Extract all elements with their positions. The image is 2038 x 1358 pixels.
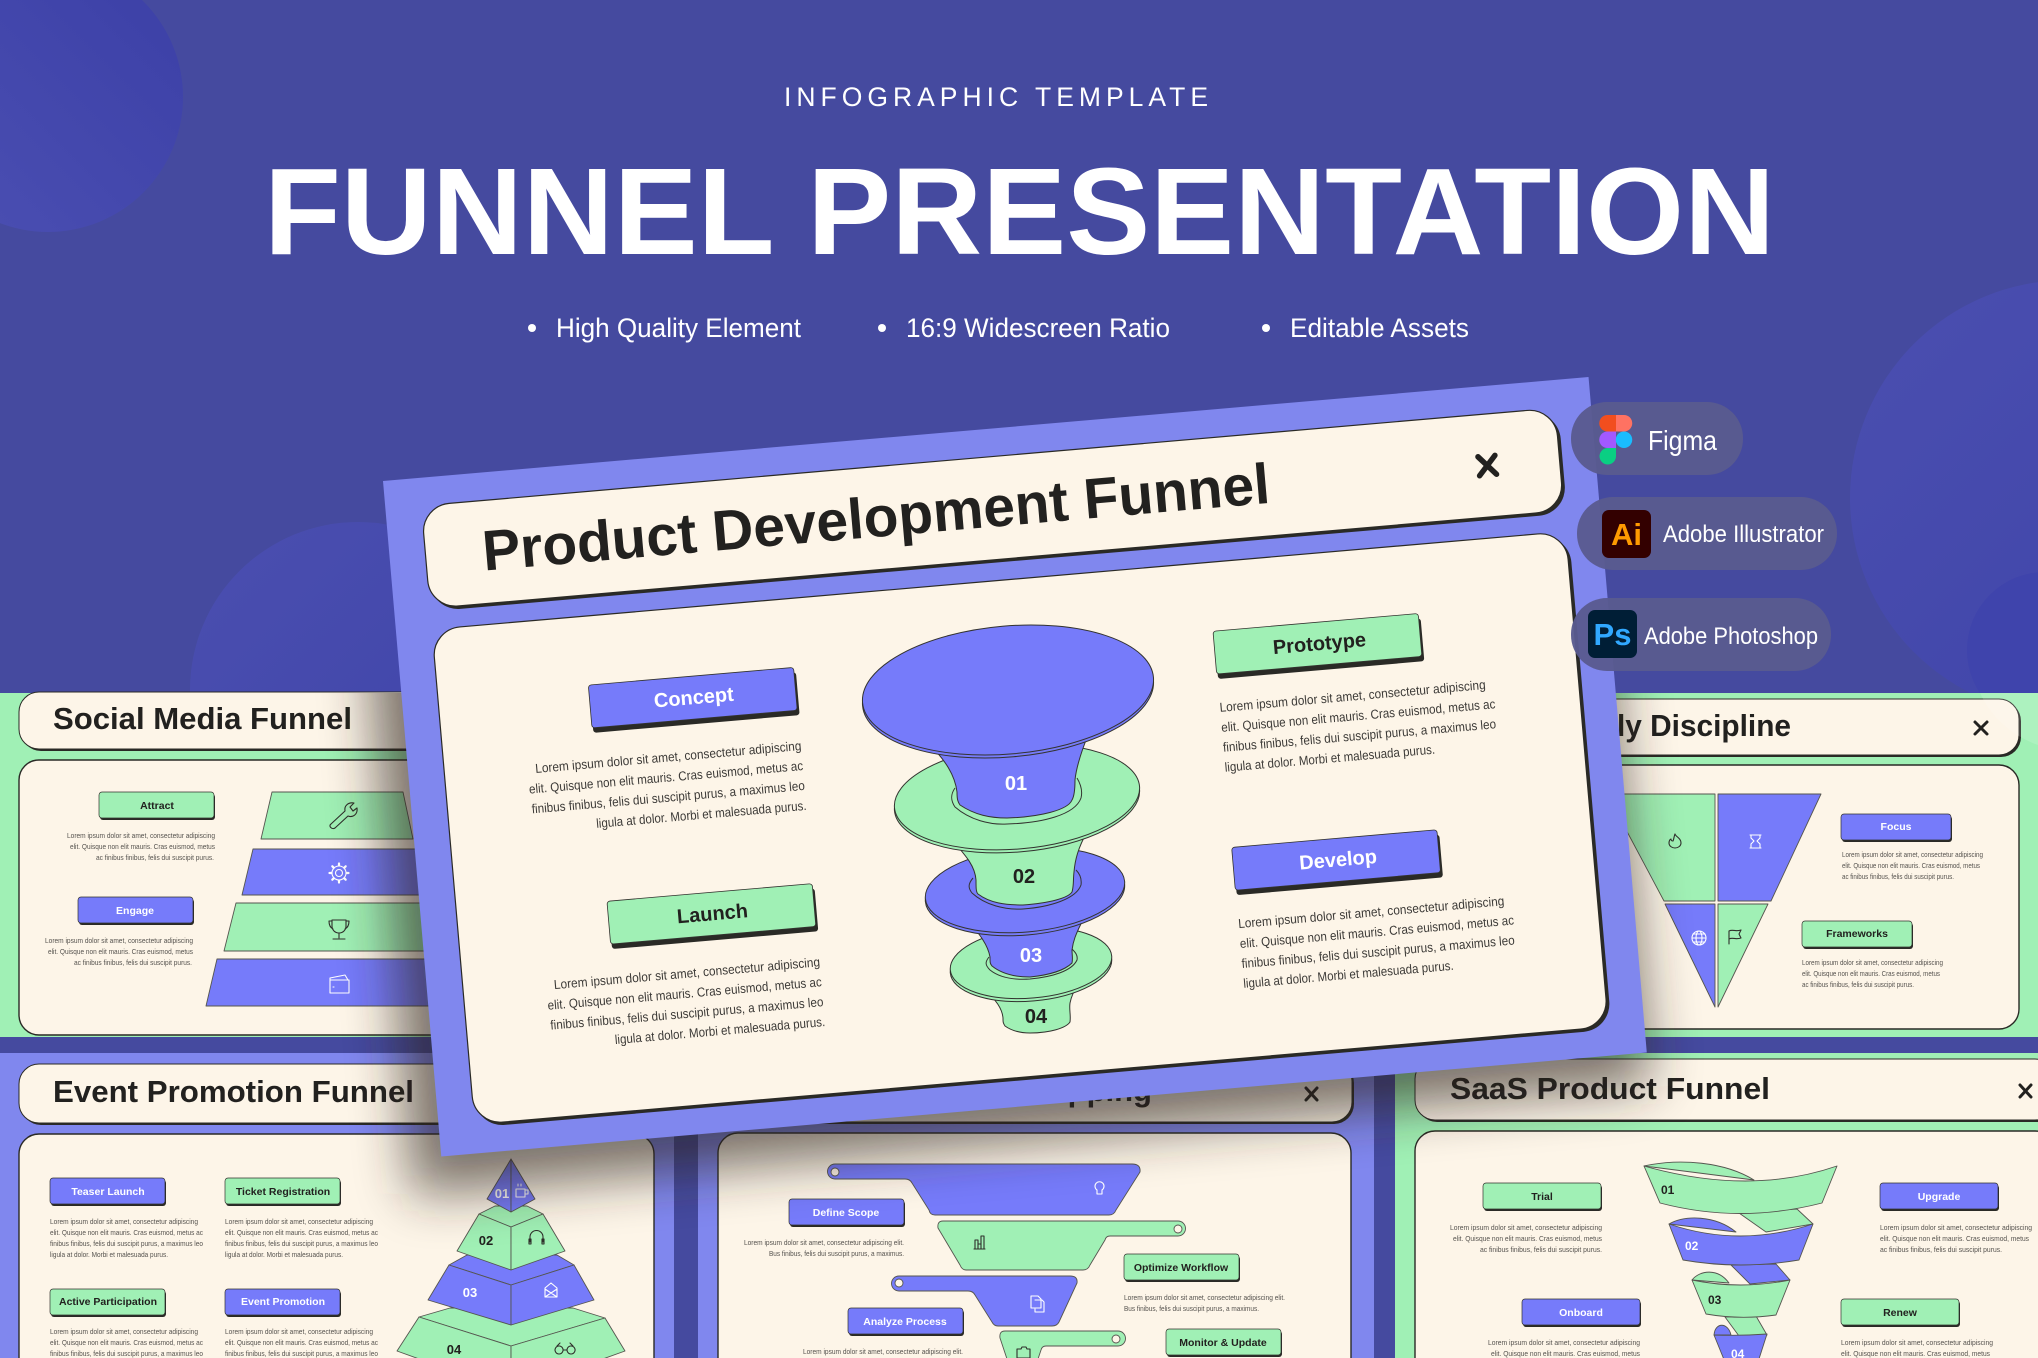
panel: saas product funnel bbox=[1374, 1037, 2038, 1358]
button: frameworks: Frameworks bbox=[1826, 928, 1888, 940]
button: optimize workflow bbox=[1124, 1254, 1240, 1282]
pyramid level 01: 01 bbox=[495, 1186, 509, 1201]
button: teaser launch: Teaser Launch bbox=[71, 1186, 145, 1198]
text: develop: finibus finibus, felis dui suscipit purus, a maximus leo bbox=[1241, 932, 1515, 971]
saas content box bbox=[1415, 1131, 2038, 1358]
text: trial: Lorem ipsum dolor sit amet, consectetur adipiscing bbox=[1450, 1223, 1602, 1232]
text: define scope: Lorem ipsum dolor sit amet, consectetur adipiscing elit. bbox=[744, 1238, 904, 1247]
tool badge: adobe photoshop bbox=[1571, 598, 1831, 671]
funnel step labels: 02 bbox=[1013, 866, 1035, 888]
text: launch: elit. Quisque non elit mauris. Cras euismod, metus ac bbox=[547, 974, 823, 1013]
discipline title bar bbox=[1498, 699, 2021, 757]
text: define scope bbox=[744, 1238, 904, 1258]
funnel top ellipse bbox=[857, 614, 1159, 769]
button: upgrade bbox=[1880, 1183, 1999, 1211]
text: optimize workflow: Lorem ipsum dolor sit amet, consectetur adipiscing elit. bbox=[1124, 1293, 1285, 1302]
background circle middle left bbox=[190, 522, 526, 858]
text: analyze process: Lorem ipsum dolor sit amet, consectetur adipiscing elit. bbox=[803, 1347, 963, 1356]
button: attract: Attract bbox=[140, 800, 174, 812]
tool badge: adobe photoshop: Adobe Photoshop bbox=[1644, 623, 1818, 650]
button: trial bbox=[1483, 1183, 1602, 1211]
ribbon 01: 01 bbox=[1661, 1183, 1675, 1197]
icon: photoshop logo bbox=[1588, 610, 1637, 658]
mapping title bar bbox=[718, 1061, 1354, 1124]
social content box bbox=[19, 760, 639, 1035]
ribbon funnel chart bbox=[1644, 1162, 1837, 1358]
eyebrow heading: INFOGRAPHIC TEMPLATE bbox=[784, 82, 1208, 112]
text: teaser launch: finibus finibus, felis dui suscipit purus, a maximus leo bbox=[50, 1239, 203, 1248]
text: event promotion: finibus finibus, felis dui suscipit purus, a maximus leo bbox=[225, 1349, 378, 1358]
text: active participation bbox=[50, 1327, 203, 1358]
pyramid level 04: 04 bbox=[447, 1342, 462, 1357]
pyramid level 01 bbox=[487, 1159, 535, 1212]
text: ticket registration: elit. Quisque non elit mauris. Cras euismod, metus ac bbox=[225, 1228, 378, 1237]
ribbon tail 2 bbox=[1731, 1264, 1790, 1284]
text: active participation: elit. Quisque non elit mauris. Cras euismod, metus ac bbox=[50, 1338, 203, 1347]
saas title bar bbox=[1415, 1059, 2038, 1122]
funnel step labels: 03 bbox=[1020, 945, 1042, 967]
text: teaser launch: elit. Quisque non elit mauris. Cras euismod, metus ac bbox=[50, 1228, 203, 1237]
background circle right bbox=[1850, 280, 2038, 716]
panel: product development funnel main card bbox=[383, 377, 1647, 1156]
panel: process mapping bbox=[674, 1037, 1374, 1358]
button: focus bbox=[1841, 814, 1952, 842]
feature list: High Quality Element bbox=[556, 313, 802, 343]
tool badge: figma bbox=[1571, 402, 1743, 475]
text: teaser launch: ligula at dolor. Morbi et malesuada purus. bbox=[50, 1250, 168, 1259]
mapping content box bbox=[718, 1133, 1351, 1358]
text: concept: Lorem ipsum dolor sit amet, consectetur adipiscing bbox=[535, 738, 802, 776]
event title bar: Event Promotion Funnel bbox=[53, 1074, 414, 1109]
text: launch: finibus finibus, felis dui suscipit purus, a maximus leo bbox=[550, 994, 824, 1033]
button: analyze process: Analyze Process bbox=[863, 1316, 947, 1328]
mapping title bar: Process Mapping bbox=[895, 1073, 1152, 1108]
text: teaser launch bbox=[50, 1217, 203, 1259]
panel: event promotion funnel bbox=[0, 1053, 674, 1358]
funnel neck 02 bbox=[948, 832, 1087, 905]
funnel disc 01 bbox=[890, 734, 1144, 863]
button: engage bbox=[78, 897, 194, 925]
text: active participation: finibus finibus, felis dui suscipit purus, a maximus leo bbox=[50, 1349, 203, 1358]
icon: figma logo bbox=[1599, 415, 1632, 464]
feature list: 16:9 Widescreen Ratio bbox=[906, 313, 1170, 343]
text: concept: elit. Quisque non elit mauris. Cras euismod, metus ac bbox=[528, 758, 804, 797]
ribbon 03 bbox=[1692, 1272, 1790, 1317]
main content box bbox=[434, 534, 1612, 1127]
text: frameworks: Lorem ipsum dolor sit amet, consectetur adipiscing bbox=[1802, 958, 1943, 967]
text: engage bbox=[45, 936, 193, 967]
panel: weekly discipline bbox=[1498, 693, 2038, 1037]
funnel step 3 bbox=[892, 1276, 1077, 1326]
tool badge: adobe illustrator bbox=[1577, 497, 1837, 570]
button: renew bbox=[1841, 1299, 1960, 1327]
button: concept: Concept bbox=[653, 684, 735, 712]
text: event promotion bbox=[225, 1327, 378, 1358]
text: ticket registration bbox=[225, 1217, 378, 1259]
event content box bbox=[19, 1134, 654, 1358]
pyramid level 02: 02 bbox=[479, 1233, 493, 1248]
ribbon 02: 02 bbox=[1685, 1239, 1699, 1253]
funnel step 2 bbox=[938, 1221, 1186, 1270]
pyramid level 03: 03 bbox=[463, 1285, 477, 1300]
button: onboard: Onboard bbox=[1559, 1307, 1603, 1319]
icon: flame bbox=[1669, 834, 1681, 848]
icon: illustrator logo bbox=[1602, 510, 1651, 558]
text: ticket registration: Lorem ipsum dolor sit amet, consectetur adipiscing bbox=[225, 1217, 373, 1226]
pyramid level 03 bbox=[428, 1255, 594, 1325]
button: define scope bbox=[789, 1199, 905, 1227]
text: frameworks: ac finibus finibus, felis dui suscipit purus. bbox=[1802, 980, 1914, 989]
text: develop: elit. Quisque non elit mauris. Cras euismod, metus ac bbox=[1239, 912, 1515, 951]
text: event promotion: Lorem ipsum dolor sit amet, consectetur adipiscing bbox=[225, 1327, 373, 1336]
text: onboard bbox=[1488, 1338, 1640, 1358]
button: monitor and update bbox=[1166, 1329, 1282, 1357]
text: renew: Lorem ipsum dolor sit amet, consectetur adipiscing bbox=[1841, 1338, 1993, 1347]
funnel neck 04 bbox=[982, 985, 1078, 1033]
ribbon 01 bbox=[1644, 1162, 1837, 1214]
text: frameworks bbox=[1802, 958, 1943, 989]
text: focus bbox=[1842, 850, 1983, 881]
ribbon 03: 03 bbox=[1708, 1293, 1722, 1307]
text: prototype: elit. Quisque non elit mauris. Cras euismod, metus ac bbox=[1221, 696, 1496, 735]
text: teaser launch: Lorem ipsum dolor sit amet, consectetur adipiscing bbox=[50, 1217, 198, 1226]
pyramid level 04 bbox=[397, 1308, 625, 1358]
discipline content box bbox=[1498, 765, 2019, 1029]
text: ticket registration: finibus finibus, felis dui suscipit purus, a maximus leo bbox=[225, 1239, 378, 1248]
panel: social media funnel bbox=[0, 692, 641, 1037]
button: active participation: Active Participation bbox=[59, 1296, 157, 1308]
text: upgrade bbox=[1880, 1223, 2032, 1254]
text: prototype bbox=[1219, 676, 1500, 775]
button: focus: Focus bbox=[1881, 821, 1912, 833]
text: focus: ac finibus finibus, felis dui suscipit purus. bbox=[1842, 872, 1954, 881]
text: develop bbox=[1238, 892, 1518, 991]
text: develop: ligula at dolor. Morbi et malesuada purus. bbox=[1243, 958, 1454, 991]
social title bar bbox=[19, 692, 641, 751]
text: concept bbox=[527, 738, 808, 836]
tool badge: figma: Figma bbox=[1648, 425, 1717, 456]
button: develop: Develop bbox=[1298, 846, 1378, 875]
icon: globe bbox=[1692, 931, 1706, 945]
main card rotated layout bbox=[383, 377, 1647, 1156]
ribbon 04 bbox=[1714, 1325, 1767, 1358]
social title bar: Social Media Funnel bbox=[53, 701, 352, 736]
icon: trophy bbox=[329, 920, 349, 939]
background circle small right bbox=[1967, 572, 2038, 728]
icon: photoshop logo: Ps bbox=[1594, 617, 1631, 652]
discipline title bar: ly Discipline bbox=[1617, 708, 1791, 743]
ribbon tail 3 bbox=[1725, 1316, 1767, 1336]
button: analyze process bbox=[848, 1308, 964, 1336]
button: renew: Renew bbox=[1883, 1307, 1918, 1319]
text: engage: Lorem ipsum dolor sit amet, consectetur adipiscing bbox=[45, 936, 193, 945]
text: prototype: ligula at dolor. Morbi et malesuada purus. bbox=[1224, 742, 1436, 775]
feature list bbox=[528, 313, 1469, 343]
tool badge: adobe illustrator: Adobe Illustrator bbox=[1663, 521, 1824, 548]
text: launch bbox=[545, 954, 826, 1053]
text: develop: Lorem ipsum dolor sit amet, consectetur adipiscing bbox=[1238, 893, 1505, 931]
text: ticket registration: ligula at dolor. Morbi et malesuada purus. bbox=[225, 1250, 343, 1259]
icon: wallet bbox=[330, 975, 349, 993]
funnel step 1 bbox=[828, 1164, 1140, 1215]
funnel step labels: 04 bbox=[1025, 1006, 1048, 1028]
inverted triangle chart bbox=[1607, 794, 1821, 1007]
text: launch: Lorem ipsum dolor sit amet, consectetur adipiscing bbox=[553, 954, 821, 992]
background circle top left bbox=[0, 0, 183, 232]
event title bar bbox=[19, 1064, 654, 1125]
button: onboard bbox=[1522, 1299, 1641, 1327]
text: prototype: Lorem ipsum dolor sit amet, consectetur adipiscing bbox=[1219, 677, 1486, 715]
text: focus: elit. Quisque non elit mauris. Cras euismod, metus bbox=[1842, 861, 1980, 870]
text: trial: ac finibus finibus, felis dui suscipit purus. bbox=[1480, 1245, 1602, 1254]
text: renew: elit. Quisque non elit mauris. Cras euismod, metus bbox=[1841, 1349, 1990, 1358]
funnel neck 01 bbox=[930, 735, 1088, 818]
button: event promotion bbox=[225, 1289, 341, 1317]
button: define scope: Define Scope bbox=[813, 1207, 879, 1219]
button: attract bbox=[99, 792, 215, 820]
text: attract: elit. Quisque non elit mauris. Cras euismod, metus bbox=[70, 842, 215, 851]
icon: flag bbox=[1729, 930, 1741, 944]
text: frameworks: elit. Quisque non elit mauris. Cras euismod, metus bbox=[1802, 969, 1940, 978]
button: prototype: Prototype bbox=[1272, 629, 1367, 659]
button: trial: Trial bbox=[1531, 1191, 1553, 1203]
button: ticket registration bbox=[225, 1178, 341, 1206]
text: active participation: Lorem ipsum dolor sit amet, consectetur adipiscing bbox=[50, 1327, 198, 1336]
text: focus: Lorem ipsum dolor sit amet, consectetur adipiscing bbox=[1842, 850, 1983, 859]
text: attract bbox=[67, 831, 215, 862]
funnel step labels: 01 bbox=[1005, 773, 1027, 795]
text: onboard: elit. Quisque non elit mauris. Cras euismod, metus bbox=[1491, 1349, 1640, 1358]
button: develop bbox=[1232, 830, 1443, 895]
button: prototype bbox=[1213, 613, 1424, 679]
text: concept: finibus finibus, felis dui suscipit purus, a maximus leo bbox=[531, 778, 805, 816]
button: active participation bbox=[50, 1289, 166, 1317]
text: prototype: finibus finibus, felis dui suscipit purus, a maximus leo bbox=[1222, 716, 1497, 755]
text: optimize workflow bbox=[1124, 1293, 1285, 1313]
button: concept bbox=[588, 667, 800, 733]
text: event promotion: elit. Quisque non elit mauris. Cras euismod, metus ac bbox=[225, 1338, 378, 1347]
button: launch bbox=[607, 883, 818, 949]
central 3D funnel chart bbox=[857, 614, 1159, 1033]
funnel neck 03 bbox=[968, 918, 1084, 977]
feature list: Editable Assets bbox=[1290, 313, 1469, 343]
icon: hourglass bbox=[1750, 835, 1761, 848]
text: trial bbox=[1450, 1223, 1602, 1254]
main card drop shadow bbox=[334, 693, 1685, 1230]
funnel disc 02 bbox=[922, 839, 1128, 944]
button: frameworks bbox=[1802, 921, 1913, 949]
text: optimize workflow: Bus finibus, felis dui suscipit purus, a maximus. bbox=[1124, 1304, 1259, 1313]
text: onboard: Lorem ipsum dolor sit amet, consectetur adipiscing bbox=[1488, 1338, 1640, 1347]
text: engage: ac finibus finibus, felis dui suscipit purus. bbox=[74, 958, 192, 967]
text: trial: elit. Quisque non elit mauris. Cras euismod, metus bbox=[1453, 1234, 1602, 1243]
translucent circle overlay right bbox=[1980, 693, 2038, 745]
funnel step 4 bbox=[1000, 1331, 1126, 1358]
main title bar bbox=[421, 408, 1567, 611]
text: attract: Lorem ipsum dolor sit amet, consectetur adipiscing bbox=[67, 831, 215, 840]
text: define scope: Bus finibus, felis dui suscipit purus, a maximus. bbox=[769, 1249, 904, 1258]
icon: wrench bbox=[330, 803, 357, 829]
button: teaser launch bbox=[50, 1178, 166, 1206]
main title bar: Product Development Funnel bbox=[480, 452, 1272, 584]
text: launch: ligula at dolor. Morbi et malesuada purus. bbox=[614, 1014, 826, 1047]
icon: illustrator logo: Ai bbox=[1611, 517, 1642, 552]
button: optimize workflow: Optimize Workflow bbox=[1134, 1262, 1229, 1274]
button: ticket registration: Ticket Registration bbox=[236, 1186, 330, 1198]
text: upgrade: ac finibus finibus, felis dui suscipit purus. bbox=[1880, 1245, 2002, 1254]
text: renew bbox=[1841, 1338, 1993, 1358]
text: engage: elit. Quisque non elit mauris. Cras euismod, metus bbox=[48, 947, 193, 956]
button: monitor and update: Monitor & Update bbox=[1179, 1337, 1267, 1349]
ribbon tail 1 bbox=[1739, 1209, 1813, 1232]
funnel step labels bbox=[1005, 773, 1048, 1028]
pyramid level 02 bbox=[457, 1206, 565, 1270]
text: concept: ligula at dolor. Morbi et malesuada purus. bbox=[596, 798, 807, 831]
button: event promotion: Event Promotion bbox=[241, 1296, 325, 1308]
button: launch: Launch bbox=[676, 900, 749, 928]
3D pyramid chart bbox=[397, 1159, 625, 1358]
stepped funnel chart bbox=[206, 792, 490, 1006]
button: upgrade: Upgrade bbox=[1918, 1191, 1960, 1203]
saas title bar: SaaS Product Funnel bbox=[1450, 1071, 1770, 1106]
icon: gear bbox=[330, 864, 348, 882]
button: engage: Engage bbox=[116, 905, 154, 917]
funnel disc 03 bbox=[947, 921, 1115, 1008]
ribbon 02 bbox=[1669, 1218, 1813, 1265]
text: attract: ac finibus finibus, felis dui suscipit purus. bbox=[96, 853, 214, 862]
main title: FUNNEL PRESENTATION bbox=[264, 144, 1775, 281]
